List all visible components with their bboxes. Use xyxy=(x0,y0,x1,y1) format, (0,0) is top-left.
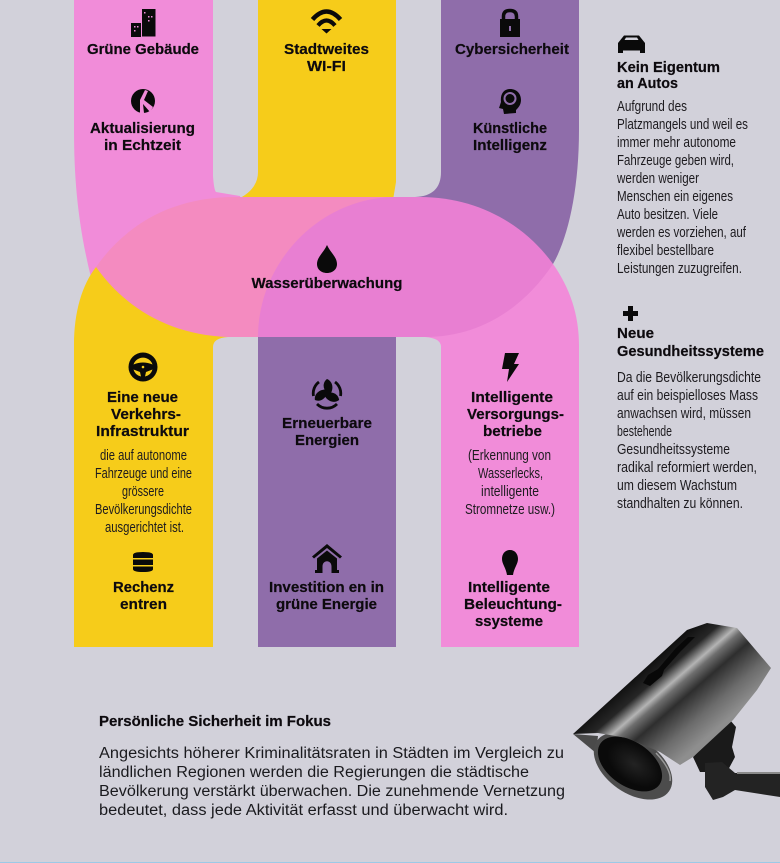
label: Eine neue xyxy=(107,390,178,406)
camera flap xyxy=(573,734,598,753)
band: bottom centre purple xyxy=(258,320,396,647)
body text: Bevölkerung verstärkt überwachen. Die zunehmende Vernetzung xyxy=(99,783,565,800)
camera arm highlight xyxy=(737,772,780,774)
item: Investitionen in grüne Energie xyxy=(269,544,384,613)
label: Künstliche xyxy=(473,121,547,137)
icon: car xyxy=(618,36,645,53)
panel: Neue Gesundheitssysteme xyxy=(617,306,764,512)
icon: turbine xyxy=(312,379,341,408)
label: Stadtweites xyxy=(284,42,369,58)
label: Grüne Gebäude xyxy=(87,42,199,58)
label xyxy=(464,580,562,630)
icon: real-time dial xyxy=(131,89,155,113)
body text xyxy=(616,99,748,277)
item: Cybersicherheit xyxy=(455,10,569,58)
crossing: right lens xyxy=(258,197,553,337)
label xyxy=(467,390,564,440)
body text: standhalten zu können. xyxy=(617,496,743,512)
heading: Kein Eigentum xyxy=(617,60,720,76)
label: Intelligenz xyxy=(473,138,547,154)
camera lens glass xyxy=(588,725,672,803)
camera lens barrel xyxy=(581,719,685,813)
camera top bracket xyxy=(643,637,695,686)
body text: Fahrzeuge geben wird, xyxy=(617,153,734,169)
body text: bestehende xyxy=(617,424,672,440)
label: Intelligente xyxy=(468,580,550,596)
crossing: left lens xyxy=(96,197,400,337)
icon: lightning bolt xyxy=(502,353,519,382)
camera neck xyxy=(693,720,736,772)
panel: Kein Eigentum an Autos xyxy=(616,36,748,277)
image: security camera xyxy=(573,623,780,813)
body text: bedeutet, dass jede Aktivität erfasst und überwacht wird. xyxy=(99,802,508,819)
label: entren xyxy=(120,597,167,613)
description: Bevölkerungsdichte xyxy=(95,502,192,518)
body text: anwachsen wird, müssen xyxy=(617,406,751,422)
heading: Persönliche Sicherheit im Fokus xyxy=(99,714,331,730)
item: Rechenzentren xyxy=(113,552,174,613)
label: betriebe xyxy=(483,424,542,440)
item: Stadtweites WI-FI xyxy=(284,12,369,75)
item: Aktualisierung in Echtzeit xyxy=(90,89,195,154)
heading xyxy=(617,326,764,360)
description xyxy=(465,448,555,518)
label xyxy=(269,580,384,613)
body text: Angesichts höherer Kriminalitätsraten in Städten im Vergleich zu xyxy=(99,745,564,762)
body text: ländlichen Regionen werden die Regierungen die städtische xyxy=(99,764,529,781)
body text: werden es vorziehen, auf xyxy=(616,225,747,241)
band: top right purple xyxy=(415,0,579,264)
item: Eine neue Verkehrs-Infrastruktur xyxy=(95,352,192,536)
label xyxy=(90,121,195,154)
icon: wifi xyxy=(312,12,340,34)
item: Wasserüberwachung xyxy=(252,245,402,292)
description: grössere xyxy=(122,484,164,500)
body text: Auto besitzen. Viele xyxy=(617,207,718,223)
item: Intelligente Versorgungsbetriebe xyxy=(465,353,564,518)
label: Beleuchtung- xyxy=(464,597,562,613)
label: grüne Energie xyxy=(276,597,377,613)
icon: light bulb xyxy=(502,550,518,575)
body text: werden weniger xyxy=(616,171,699,187)
icon: database xyxy=(133,552,153,572)
label: Investition en in xyxy=(269,580,384,596)
heading: Gesundheitssysteme xyxy=(617,344,764,360)
label: WI-FI xyxy=(307,59,346,75)
icon: water drop xyxy=(317,245,337,273)
body text: immer mehr autonome xyxy=(617,135,736,151)
body text: flexibel bestellbare xyxy=(617,243,714,259)
description xyxy=(95,448,192,536)
heading: Neue xyxy=(617,326,654,342)
icon: buildings xyxy=(131,9,156,37)
label: Intelligente xyxy=(471,390,553,406)
body text: radikal reformiert werden, xyxy=(617,460,757,476)
body text xyxy=(99,745,565,819)
label xyxy=(473,121,547,154)
body text: Platzmangels und weil es xyxy=(617,117,748,133)
label xyxy=(284,42,369,75)
band: top centre yellow xyxy=(236,0,396,200)
item: Grüne Gebäude xyxy=(87,9,199,58)
bottom rule xyxy=(0,862,780,863)
label xyxy=(282,416,372,449)
description: (Erkennung von xyxy=(468,448,551,464)
label: Erneuerbare xyxy=(282,416,372,432)
heading: an Autos xyxy=(617,76,678,92)
body text: Leistungen zuzugreifen. xyxy=(617,261,742,277)
label: Cybersicherheit xyxy=(455,42,569,58)
label: Rechenz xyxy=(113,580,174,596)
item: Intelligente Beleuchtungssysteme xyxy=(464,550,562,630)
label: Energien xyxy=(295,433,359,449)
description: Stromnetze usw.) xyxy=(465,502,555,518)
camera lens rim highlight xyxy=(656,753,670,781)
label: in Echtzeit xyxy=(104,138,181,154)
label: Wasserüberwachung xyxy=(252,276,402,292)
description: Wasserlecks, xyxy=(478,466,543,482)
description: ausgerichtet ist. xyxy=(105,520,184,536)
band: bottom right pink xyxy=(420,264,579,647)
camera hood xyxy=(573,623,771,765)
camera arm xyxy=(705,762,780,800)
label: Infrastruktur xyxy=(96,424,189,440)
body text: Menschen ein eigenes xyxy=(617,189,733,205)
icon: house xyxy=(312,544,342,573)
label xyxy=(113,580,174,613)
body text: um diesem Wachstum xyxy=(617,478,737,494)
label xyxy=(96,390,189,440)
band: bottom left yellow xyxy=(74,267,240,647)
label: Aktualisierung xyxy=(90,121,195,137)
description: die auf autonome xyxy=(100,448,187,464)
description: intelligente xyxy=(481,484,539,500)
icon: padlock xyxy=(500,10,520,37)
panel: Persönliche Sicherheit im Fokus xyxy=(99,714,565,819)
body text: Gesundheitssysteme xyxy=(617,442,730,458)
icon: head xyxy=(499,89,521,114)
heading xyxy=(617,60,720,92)
label: Verkehrs- xyxy=(111,407,181,423)
item: Künstliche Intelligenz xyxy=(473,89,547,154)
label: ssysteme xyxy=(475,614,543,630)
band: top left pink xyxy=(74,0,260,300)
item: Erneuerbare Energien xyxy=(282,379,372,449)
icon: steering wheel xyxy=(128,352,158,382)
description: Fahrzeuge und eine xyxy=(95,466,192,482)
label: Versorgungs- xyxy=(467,407,564,423)
panel: woven bands xyxy=(74,0,579,647)
body text: Aufgrund des xyxy=(617,99,687,115)
icon: plus xyxy=(623,306,638,321)
body text xyxy=(617,370,761,512)
